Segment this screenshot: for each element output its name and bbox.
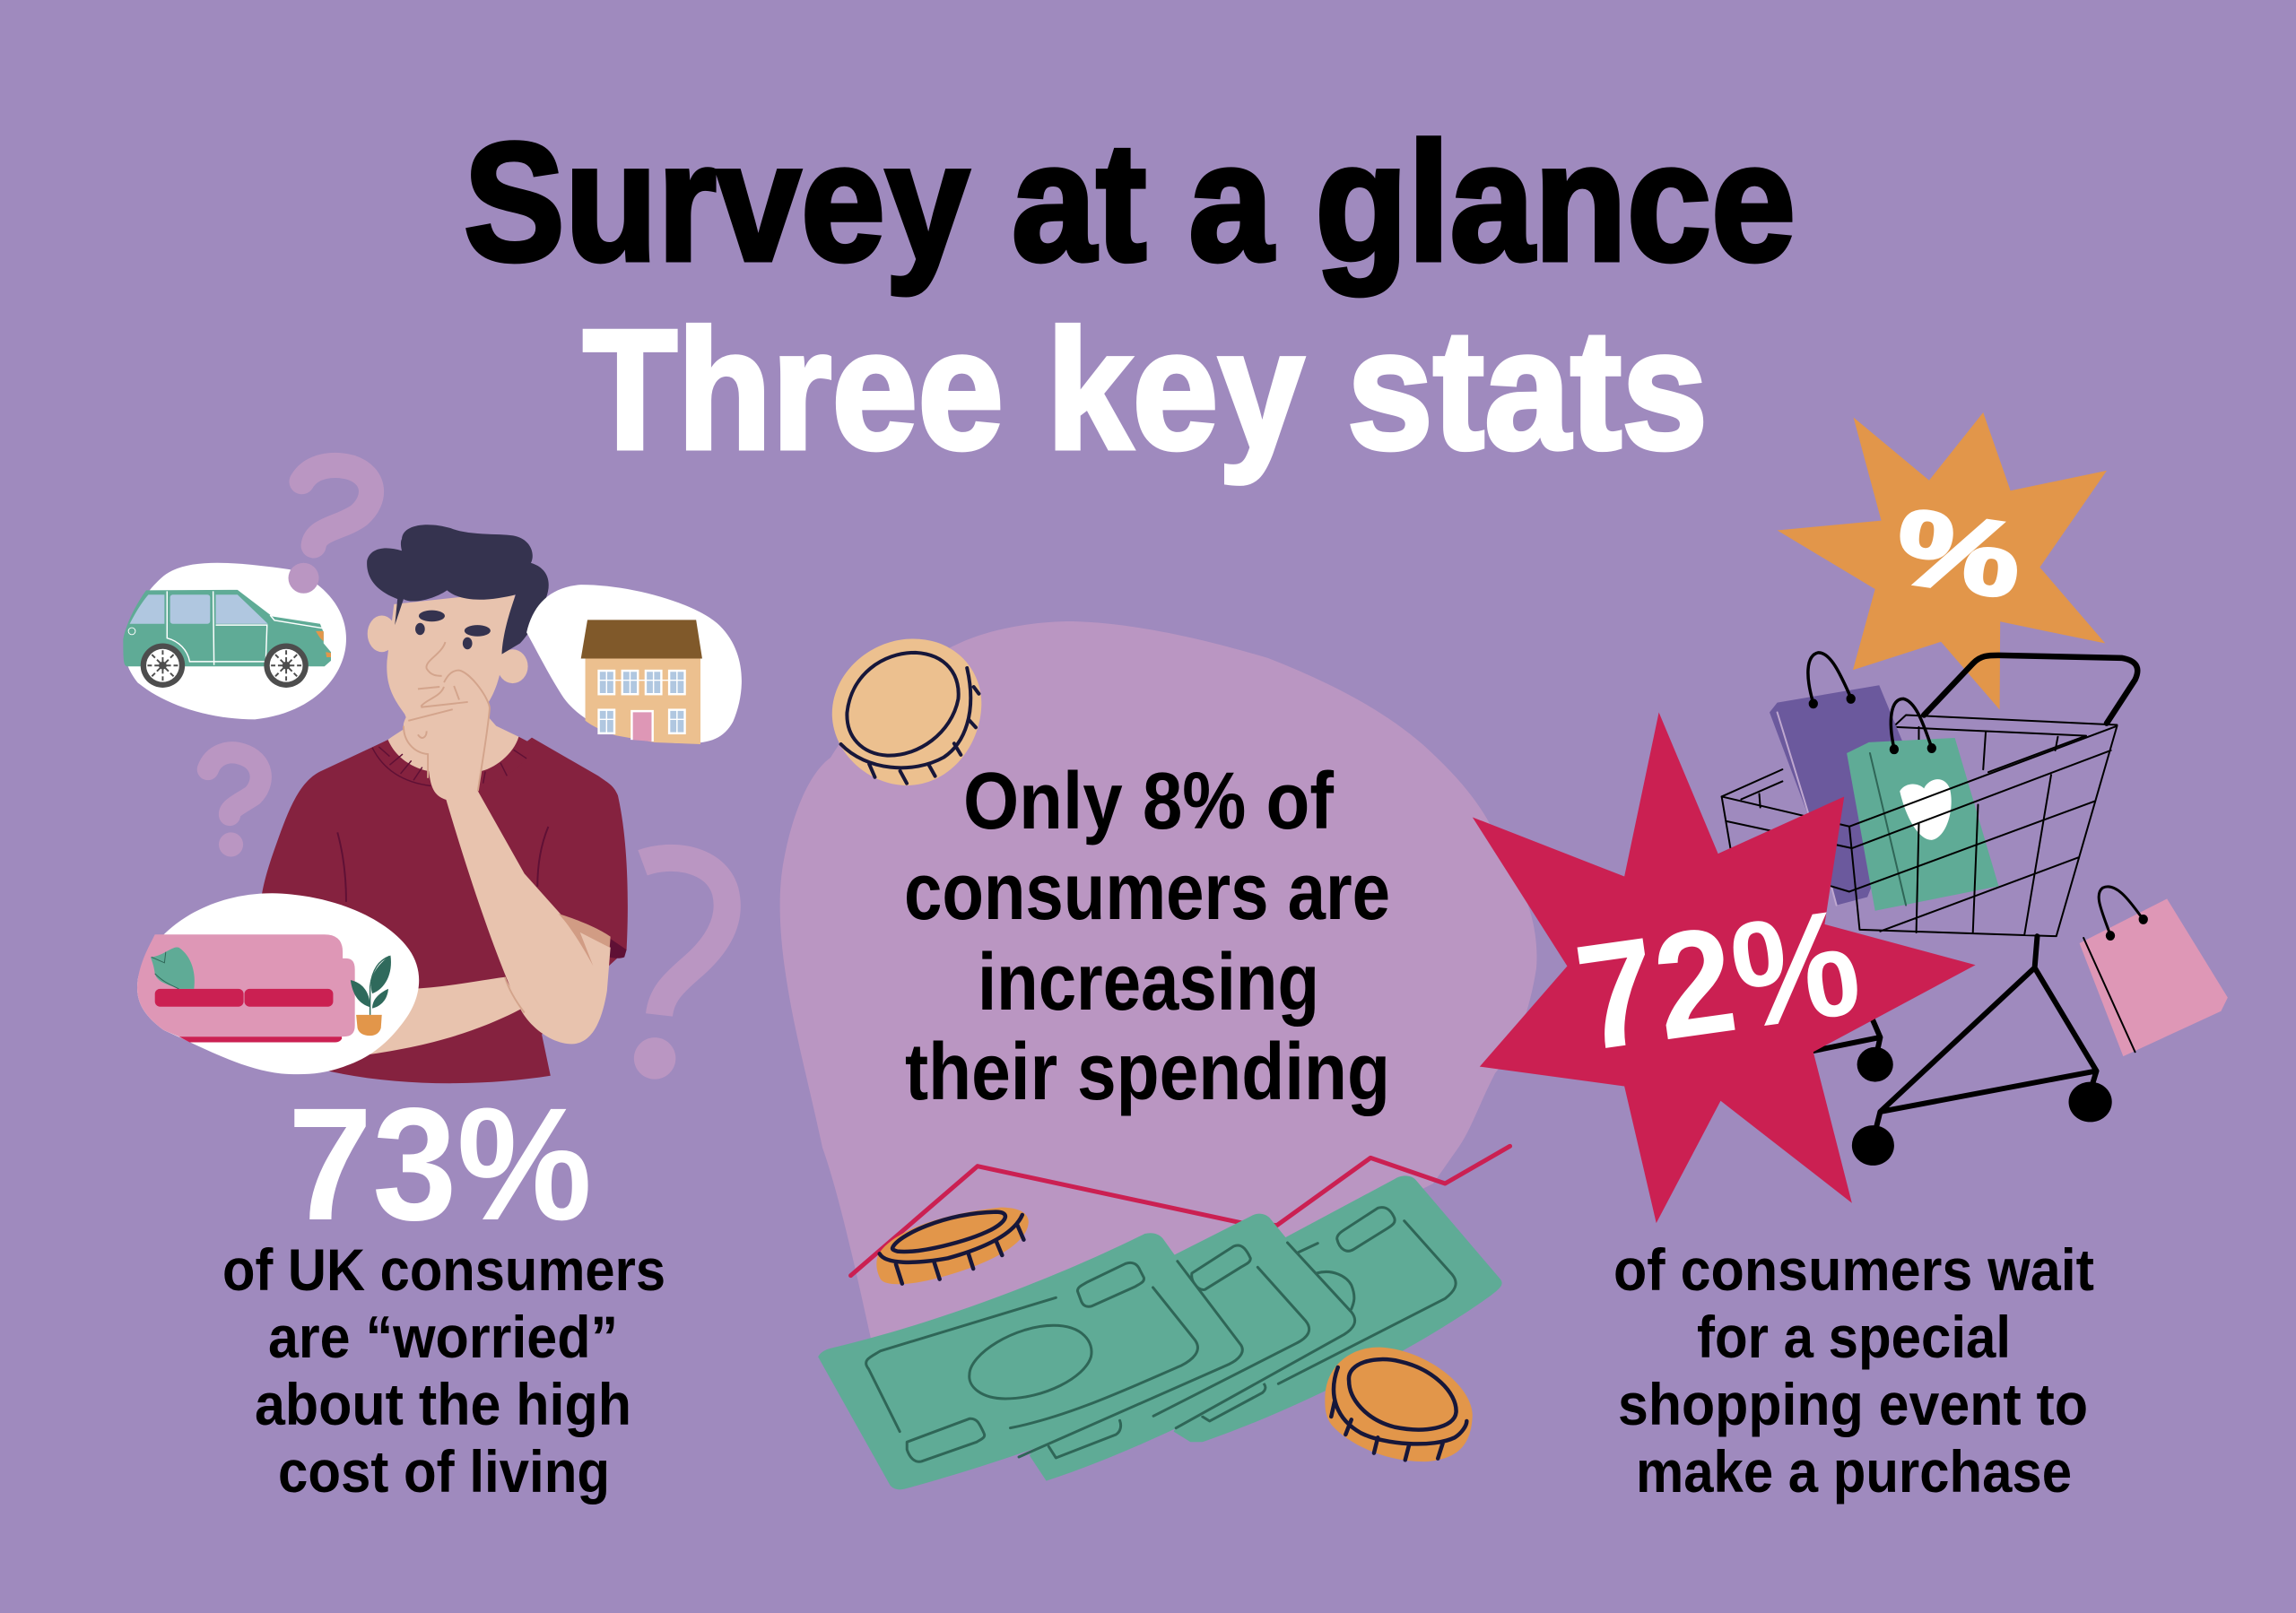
eyes and brows — [415, 611, 491, 649]
number: 72%: 72% — [1567, 877, 1869, 1083]
text block: 8 percent stat: consumers are — [904, 847, 1390, 937]
thought bubble: sofa — [137, 893, 419, 1074]
ear left — [368, 615, 396, 652]
icon: potted plant — [351, 956, 391, 1036]
cart basket — [1722, 726, 2117, 936]
icon: question mark left — [208, 752, 261, 856]
caption lines: cost of living — [278, 1438, 610, 1505]
banknote front — [818, 1233, 1244, 1489]
panel: worried man illustration — [123, 465, 742, 1083]
icon: house — [581, 620, 702, 744]
text block: 72 percent caption: make a purchase — [1636, 1438, 2072, 1505]
caption lines — [222, 1236, 665, 1505]
text block: 8 percent stat: their spending — [905, 1028, 1390, 1117]
hand and upper arm — [404, 671, 611, 1044]
icon: question mark top — [289, 465, 371, 594]
elbow shadow — [559, 914, 611, 966]
icon: green car — [123, 590, 331, 688]
banknote middle — [1030, 1214, 1356, 1481]
text block: 72 percent caption: for a special — [1697, 1304, 2011, 1370]
dot over car bubble — [289, 563, 318, 594]
icon: red starburst with 72 percent — [1473, 713, 1976, 1223]
collar — [372, 737, 533, 785]
caption lines: of UK consumers — [222, 1236, 665, 1303]
icon: sofa — [137, 934, 355, 1042]
number: 73%: 73% — [288, 1074, 592, 1253]
thought bubble: car — [123, 563, 346, 719]
finger lines — [404, 671, 525, 1012]
sleeve underside — [609, 939, 627, 958]
heading: three key stats: Three key stats — [583, 295, 1708, 485]
cart stem and legs — [1813, 936, 2097, 1128]
caption lines: about the high — [255, 1371, 631, 1437]
icon: banknotes — [818, 1175, 1502, 1489]
text block: 8 percent stat — [904, 757, 1390, 1117]
neck — [388, 708, 518, 774]
wheels — [1852, 1047, 2112, 1166]
icon: coin on money — [1325, 1348, 1473, 1461]
ear right — [498, 649, 528, 683]
wheel — [264, 644, 309, 688]
text block: 72 percent caption: of consumers wait — [1613, 1236, 2094, 1303]
forearm — [351, 977, 522, 1056]
purple bag — [1770, 653, 1917, 906]
icon: pink shopping bag — [2080, 887, 2228, 1056]
shirt — [255, 738, 628, 1083]
chart: red trend line — [851, 1146, 1510, 1276]
text block: 72 percent caption: shopping event to — [1618, 1371, 2088, 1437]
wheel — [141, 644, 185, 688]
shirt seams — [337, 827, 548, 902]
text block: 73 percent stat — [222, 1074, 665, 1505]
face — [387, 591, 516, 726]
banknote back — [1174, 1175, 1502, 1442]
percent sign: % — [1889, 487, 2028, 621]
icon: coin on chart — [876, 1208, 1029, 1284]
icon: question mark right — [634, 858, 727, 1080]
text block: 8 percent stat: Only 8% of — [963, 757, 1335, 846]
icon: pale coin — [832, 639, 981, 785]
text block: 72 percent caption — [1613, 1236, 2094, 1505]
cart handle — [1924, 655, 2137, 724]
cart back rim — [1722, 715, 2117, 808]
title — [464, 108, 1796, 485]
thought bubble: house — [526, 585, 742, 744]
panel: middle blob background — [780, 621, 1536, 1339]
nose — [426, 642, 445, 676]
text block: 8 percent stat: increasing — [978, 938, 1319, 1028]
heading: survey at a glance: Survey at a glance — [464, 108, 1796, 296]
icon: shopping cart with bags — [1722, 653, 2137, 1166]
icon: orange starburst with percent — [1778, 412, 2107, 709]
hair — [367, 525, 549, 655]
caption lines: are “worried” — [268, 1304, 618, 1370]
green bag — [1847, 698, 1998, 911]
